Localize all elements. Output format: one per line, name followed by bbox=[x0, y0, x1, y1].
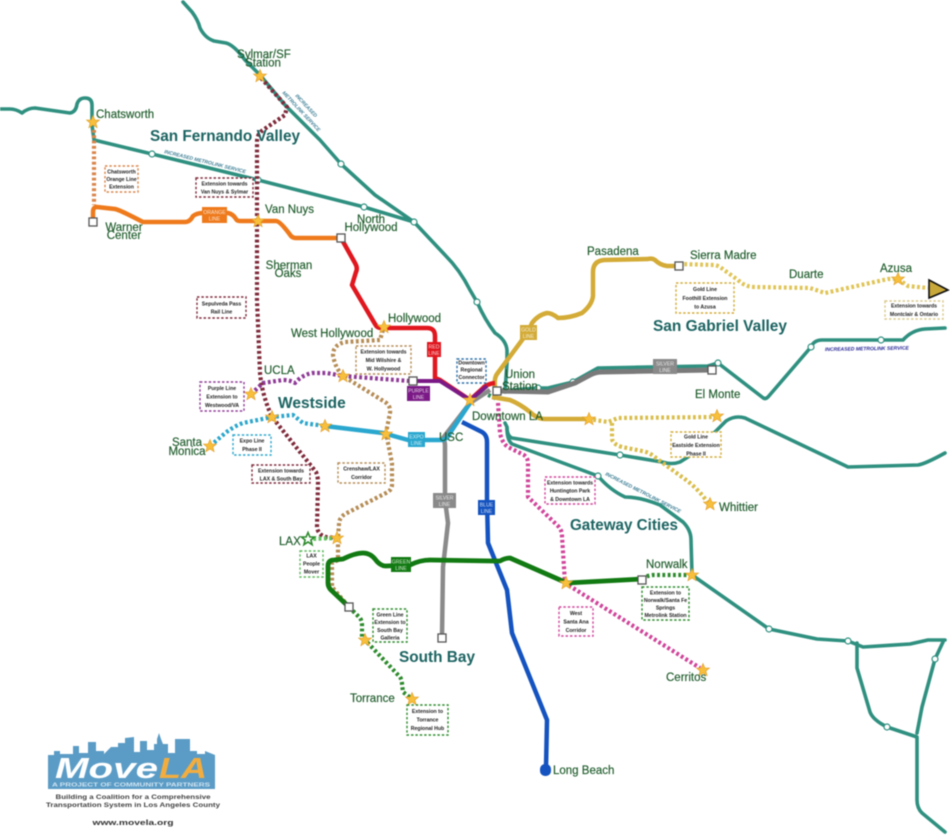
label: El Monte: El Monte bbox=[695, 389, 740, 401]
callout: Gold Line Eastside Extension Phase II: Gold Line bbox=[684, 434, 708, 440]
callout: West Santa Ana Corridor: Corridor bbox=[566, 628, 586, 634]
callout: Extension to Torrance Regional Hub: Extension to bbox=[412, 709, 443, 715]
label: Union Station: Union bbox=[505, 369, 535, 381]
callout: Sepulveda Pass Rail Line: Sepulveda Pass bbox=[202, 302, 241, 308]
logo subtitle: A PROJECT OF COMMUNITY PARTNERS bbox=[52, 782, 210, 788]
callout: LAX People Mover: LAX bbox=[306, 554, 317, 560]
label: Hollywood: Hollywood bbox=[388, 313, 441, 325]
callout: Expo Line Phase II: Expo Line bbox=[240, 438, 265, 444]
callout: Gold Line Eastside Extension Phase II: Phase II bbox=[686, 452, 706, 458]
badge: purple line bbox=[407, 386, 430, 401]
callout: Purple Line Extension bbox=[200, 382, 244, 411]
label: UCLA: UCLA bbox=[264, 365, 295, 377]
label: Chatsworth: Chatsworth bbox=[96, 109, 154, 121]
line: green line bbox=[328, 553, 642, 607]
transit stations: squares bbox=[89, 218, 716, 642]
callout: Crenshaw/LAX Corridor: Crenshaw/LAX bbox=[343, 466, 380, 472]
label: Union Station: Station bbox=[502, 381, 538, 393]
callout: Green Line Extension to South Bay Galleria: Extension to bbox=[374, 620, 406, 626]
callout: Norwalk/Santa Fe Springs Metrolink Station: Metrolink Station bbox=[644, 613, 687, 619]
callout: LAX and South Bay: LAX & South Bay bbox=[260, 476, 302, 482]
callout: Gold Line Foothill Extension to Azusa: Gold Line bbox=[693, 287, 717, 293]
callout: Gold Line Foothill Extension to Azusa: to Azusa bbox=[694, 304, 716, 310]
Increased Metrolink service labels bbox=[164, 90, 910, 515]
heading: San Fernando Valley: San Fernando Valley bbox=[150, 128, 300, 145]
label: Santa Monica: Monica bbox=[168, 446, 206, 458]
callout: Green Line Extension to South Bay Galleria: Green Line bbox=[376, 612, 404, 618]
callout: Gold Line Foothill Extension to Azusa bbox=[676, 283, 734, 313]
icon: LAX green star bbox=[302, 532, 314, 545]
badge: silver line east: LINE bbox=[659, 368, 671, 374]
logo: Move LA bbox=[46, 733, 221, 827]
label: Cerritos: Cerritos bbox=[666, 672, 707, 684]
metrolink line: San Bernardino bbox=[497, 328, 945, 398]
callout: LAX People Mover bbox=[300, 551, 323, 577]
dotted: gold line foothill extension bbox=[679, 264, 928, 293]
callout: Purple Line Extension: Extension to bbox=[206, 394, 238, 400]
callout: Chatsworth Orange Line Extension: Orange Line bbox=[106, 177, 137, 183]
badge: orange line: LINE bbox=[209, 216, 221, 222]
proposed station stars bbox=[86, 70, 904, 705]
callout: Huntington Park and Downtown LA: & Downtown LA bbox=[550, 497, 590, 503]
callout: Extension to Torrance Regional Hub: Torrance bbox=[417, 718, 439, 724]
service label: San Bernardino line: INCREASED METROLINK SERVICE bbox=[825, 346, 910, 353]
callout: Downtown Regional Connector bbox=[457, 359, 486, 383]
badge: silver line south: LINE bbox=[439, 502, 451, 508]
dotted: downtown regional connector bbox=[470, 392, 497, 400]
line: gold line bbox=[492, 259, 679, 419]
callout: LAX and South Bay bbox=[252, 465, 310, 483]
badge: silver line south bbox=[433, 493, 456, 508]
badge: purple line: LINE bbox=[413, 395, 425, 401]
callout: Mid Wilshire and W. Hollywood: Mid Wilshire & bbox=[366, 358, 402, 364]
callout: Downtown Regional Connector: Connector bbox=[459, 375, 484, 381]
metrolink stations bbox=[149, 151, 938, 730]
callout: Norwalk/Santa Fe Springs Metrolink Station bbox=[642, 587, 689, 620]
line: silver line south bbox=[442, 390, 490, 637]
heading: South Bay: South Bay bbox=[399, 649, 475, 666]
callout: West Santa Ana Corridor: Santa Ana bbox=[563, 620, 589, 626]
label: Sierra Madre: Sierra Madre bbox=[690, 250, 756, 262]
badge: orange line bbox=[202, 207, 227, 223]
badge: green line: LINE bbox=[395, 566, 407, 572]
badge: gold line bbox=[520, 325, 537, 340]
badge: silver line south: SILVER bbox=[435, 496, 454, 502]
label: Sylmar/SF Station: Sylmar/SF bbox=[237, 49, 291, 61]
callout: Montclair and Ontario: Extension towards bbox=[891, 304, 937, 310]
badge: green line: GREEN bbox=[392, 560, 410, 566]
callout: Chatsworth Orange Line Extension: Extension bbox=[109, 184, 134, 190]
label: Union Station bbox=[502, 369, 538, 393]
callout: LAX People Mover: People bbox=[303, 562, 320, 568]
dotted: purple line extension bbox=[251, 373, 410, 394]
dotted: gold line eastside extension bbox=[588, 417, 717, 503]
service label: Antelope Valley line: INCREASED bbox=[294, 93, 318, 119]
callout: Crenshaw/LAX Corridor: Corridor bbox=[351, 475, 372, 481]
line badges bbox=[202, 207, 677, 572]
service label: Orange County line: INCREASED METROLINK SERVICE bbox=[604, 471, 682, 515]
label: Sylmar/SF Station: Station bbox=[245, 58, 281, 70]
callout: Extension to Torrance Regional Hub bbox=[407, 705, 448, 735]
line: expo line bbox=[325, 403, 470, 440]
callout: Huntington Park and Downtown LA bbox=[545, 477, 595, 504]
label: Sherman Oaks: Oaks bbox=[275, 268, 302, 280]
callout: Green Line Extension to South Bay Galleria: South Bay bbox=[377, 628, 403, 634]
line: blue line bbox=[462, 422, 547, 768]
badge: red line bbox=[427, 342, 441, 357]
badge: blue line: LINE bbox=[481, 509, 493, 515]
logo skyline panel bbox=[48, 733, 215, 789]
label: Santa Monica: Santa bbox=[172, 437, 203, 449]
label: Sylmar/SF Station bbox=[237, 49, 291, 70]
callout: Huntington Park and Downtown LA: Extension towards bbox=[547, 480, 593, 486]
badge: expo line: EXPO bbox=[409, 434, 424, 440]
icon: arrow towards Montclair and Ontario bbox=[929, 280, 948, 298]
badge: gold line: GOLD bbox=[521, 328, 536, 334]
logo tagline bbox=[46, 795, 221, 809]
callout: Montclair and Ontario bbox=[885, 301, 943, 319]
heading: San Gabriel Valley: San Gabriel Valley bbox=[653, 318, 787, 335]
callout: Montclair and Ontario: Montclair & Ontario bbox=[890, 312, 938, 318]
label: Warner Center: Warner bbox=[105, 222, 143, 234]
dotted: Chatsworth orange line extension bbox=[92, 130, 96, 205]
callout: LAX and South Bay: Extension towards bbox=[258, 468, 304, 474]
dotted: expo line phase II bbox=[210, 415, 325, 446]
service label: Ventura line: INCREASED METROLINK SERVICE bbox=[164, 149, 247, 175]
callout: Mid Wilshire and W. Hollywood: W. Hollywood bbox=[367, 366, 400, 372]
line: orange line bbox=[93, 207, 341, 238]
region headings bbox=[150, 128, 787, 666]
icon: blue line terminus bbox=[540, 764, 551, 776]
logo wordmark: Move: Move bbox=[55, 753, 158, 785]
line: red line bbox=[341, 238, 495, 400]
badge: gold line: LINE bbox=[523, 334, 535, 340]
label: Santa Monica bbox=[168, 437, 206, 458]
badge: red line: LINE bbox=[428, 351, 440, 357]
metrolink line: southeast branch bbox=[857, 642, 945, 832]
badge: orange line: ORANGE bbox=[203, 210, 226, 216]
place labels bbox=[96, 49, 913, 777]
label: Sherman Oaks bbox=[266, 260, 312, 280]
label: Warner Center: Center bbox=[107, 230, 141, 242]
badge: red line: RED bbox=[429, 344, 440, 350]
line: silver line transitway east bbox=[498, 370, 712, 392]
callout: West Santa Ana Corridor: West bbox=[570, 611, 582, 617]
badge: blue line bbox=[478, 500, 495, 515]
callout: Downtown Regional Connector: Regional bbox=[461, 368, 483, 374]
service label: Antelope Valley line: METROLINK SERVICE bbox=[281, 90, 322, 134]
callout: Gold Line Eastside Extension Phase II: Eastside Extension bbox=[672, 443, 720, 449]
label: Sherman Oaks: Sherman bbox=[266, 260, 312, 272]
callout: Norwalk/Santa Fe Springs Metrolink Station: Norwalk/Santa Fe bbox=[644, 598, 687, 604]
callout: Extension towards Van Nuys and Sylmar: Van Nuys & Sylmar bbox=[201, 190, 248, 196]
metrolink line: Riverside bbox=[505, 417, 945, 467]
label: Van Nuys: Van Nuys bbox=[265, 204, 314, 216]
metrolink line: Ventura County bbox=[0, 98, 414, 222]
badge: blue line: BLUE bbox=[480, 502, 494, 508]
callout: Downtown Regional Connector: Downtown bbox=[458, 360, 485, 366]
callout: Extension towards Van Nuys and Sylmar bbox=[196, 178, 253, 197]
label: Long Beach: Long Beach bbox=[553, 765, 614, 777]
callout: Mid Wilshire and W. Hollywood: Extension towards bbox=[360, 350, 407, 356]
metrolink line: Orange County bbox=[507, 428, 945, 647]
dotted: LAX people mover bbox=[308, 538, 337, 539]
logo url: www.movela.org bbox=[91, 820, 174, 827]
callout: Sepulveda Pass Rail Line: Rail Line bbox=[211, 310, 232, 316]
heading: Gateway Cities: Gateway Cities bbox=[570, 517, 678, 534]
line: purple line bbox=[413, 381, 487, 400]
dotted: Sepulveda / Van Nuys / Sylmar extension bbox=[257, 78, 337, 538]
label: West Hollywood: West Hollywood bbox=[291, 328, 373, 340]
badge: green line bbox=[391, 557, 411, 572]
label: USC: USC bbox=[439, 432, 463, 444]
label: Torrance: Torrance bbox=[350, 693, 395, 705]
label: North Hollywood bbox=[344, 214, 398, 234]
callout: Purple Line Extension: Westwood/VA bbox=[205, 403, 239, 409]
callout: LAX People Mover: Mover bbox=[304, 570, 319, 576]
label: North Hollywood: North bbox=[357, 214, 385, 226]
logo tagline: Transportation System in Los Angeles County bbox=[46, 803, 221, 809]
logo tagline: Building a Coalition for a Comprehensive bbox=[56, 795, 211, 801]
badge: expo line bbox=[408, 432, 425, 447]
callout: Expo Line Phase II: Phase II bbox=[242, 447, 262, 453]
callout: Norwalk/Santa Fe Springs Metrolink Station: Springs bbox=[656, 606, 675, 612]
callout: Extension towards Van Nuys and Sylmar: Extension towards bbox=[201, 182, 248, 188]
callout: Crenshaw/LAX Corridor bbox=[338, 463, 385, 483]
badge: silver line east: SILVER bbox=[656, 362, 674, 368]
dotted: West Santa Ana and Huntington Park corridor bbox=[498, 403, 700, 668]
callout: Huntington Park and Downtown LA: Huntington Park bbox=[550, 488, 590, 494]
callout: Mid Wilshire and W. Hollywood bbox=[356, 346, 411, 374]
callout: Sepulveda Pass Rail Line bbox=[197, 297, 246, 318]
label: Warner Center bbox=[105, 222, 143, 242]
dotted: green line extensions bbox=[349, 575, 692, 699]
label: Pasadena: Pasadena bbox=[587, 246, 639, 258]
label: Azusa: Azusa bbox=[880, 263, 913, 275]
label: Downtown LA: Downtown LA bbox=[472, 411, 543, 423]
badge: expo line: LINE bbox=[411, 441, 423, 447]
label: North Hollywood: Hollywood bbox=[344, 222, 398, 234]
heading: Westside: Westside bbox=[278, 395, 346, 412]
badge: silver line east bbox=[653, 359, 677, 374]
callout: Expo Line Phase II bbox=[233, 435, 271, 455]
callout: West Santa Ana Corridor bbox=[559, 607, 593, 636]
metrolink line: Antelope Valley bbox=[183, 2, 507, 392]
callout: Green Line Extension to South Bay Galleria bbox=[373, 609, 407, 642]
callout: Extension to Torrance Regional Hub: Regional Hub bbox=[411, 726, 444, 732]
callout: Purple Line Extension: Purple Line bbox=[208, 386, 236, 392]
callout: Gold Line Eastside Extension Phase II bbox=[671, 432, 721, 458]
label: Duarte: Duarte bbox=[789, 269, 824, 281]
badge: purple line: PURPLE bbox=[408, 388, 429, 394]
label: Whittier: Whittier bbox=[719, 502, 758, 514]
callout: Gold Line Foothill Extension to Azusa: Foothill Extension bbox=[683, 296, 727, 302]
label: LAX: LAX bbox=[279, 536, 301, 548]
callout: Chatsworth Orange Line Extension bbox=[105, 166, 138, 192]
callout: Green Line Extension to South Bay Galleria: Galleria bbox=[380, 636, 400, 642]
project callout boxes bbox=[105, 166, 943, 735]
dotted: Crenshaw and West Hollywood corridor bbox=[332, 330, 392, 607]
logo wordmark: LA: LA bbox=[159, 753, 207, 785]
callout: Norwalk/Santa Fe Springs Metrolink Station: Extension to bbox=[650, 590, 681, 596]
label: Norwalk: Norwalk bbox=[646, 559, 688, 571]
callout: Chatsworth Orange Line Extension: Chatsworth bbox=[107, 170, 136, 176]
